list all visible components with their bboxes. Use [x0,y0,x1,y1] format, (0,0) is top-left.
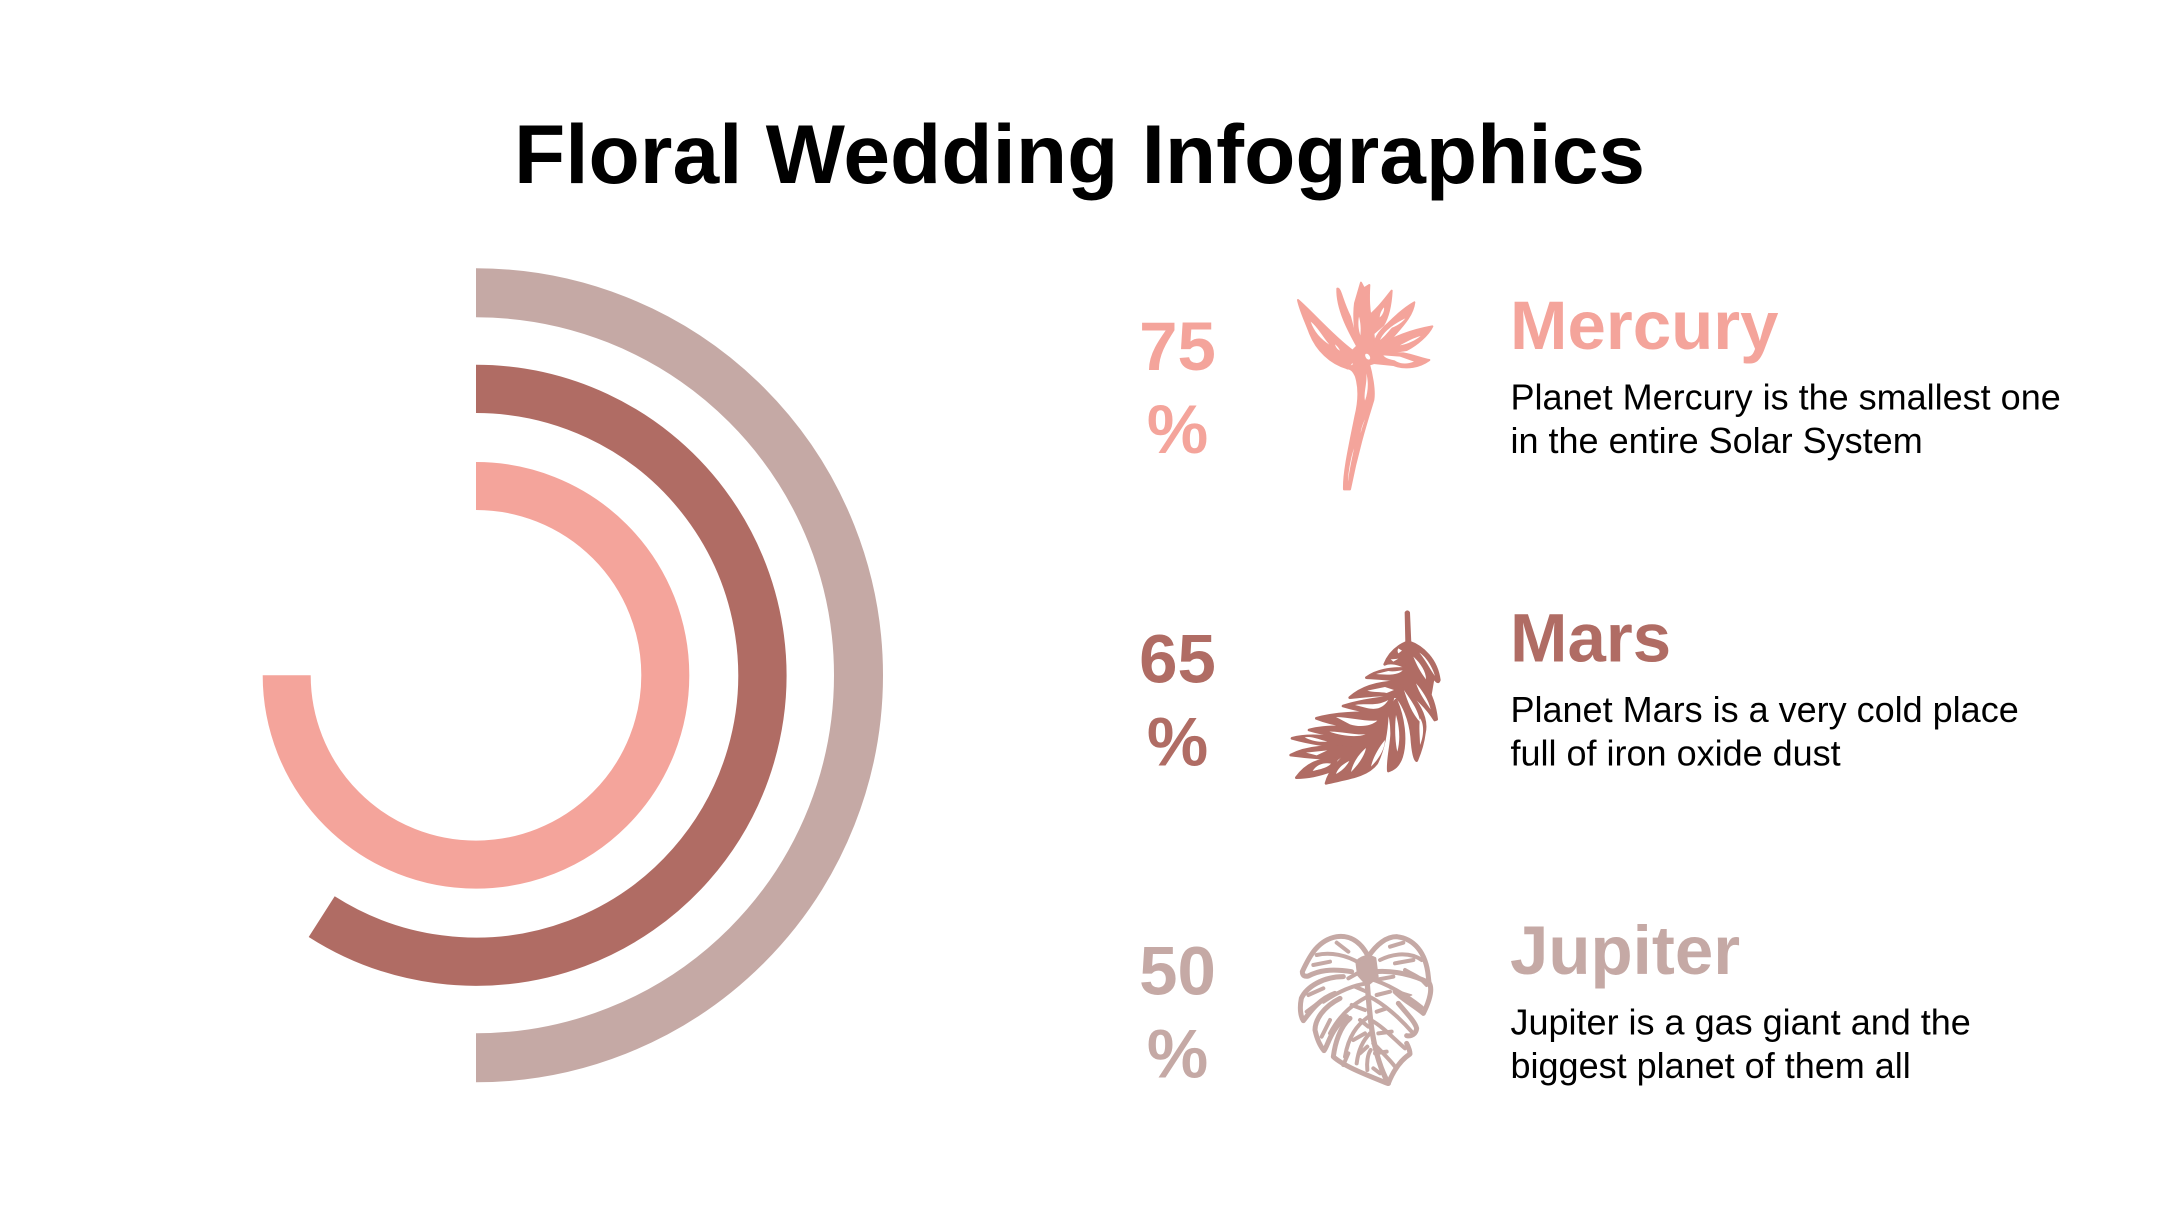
flower centre [1348,343,1375,368]
icon: bird of paradise flower [1298,283,1432,489]
inner ring: Mercury 75% [287,486,665,865]
leaf centre [1357,956,1377,985]
description: Mercury: Planet Mercury is the smallest one [1510,376,2061,418]
percentage: 75%: 75 [1139,308,1216,385]
radial progress chart [287,293,858,1058]
description: Mars: Planet Mars is a very cold place [1510,689,2019,730]
title: Floral Wedding Infographics [514,107,1645,201]
percentage: 75%: % [1147,391,1208,468]
percentage: 65%: 65 [1139,620,1216,698]
icon: feather leaf [1291,612,1439,783]
icon: monstera leaf [1300,936,1431,1083]
percentage: 65%: % [1147,704,1208,780]
row: Mars [1139,600,2019,783]
label: Jupiter: Jupiter [1510,912,1740,989]
middle ring: Mars [322,389,762,962]
row: Jupiter [1139,912,1971,1092]
row: Mercury [1139,283,2061,489]
description: Jupiter: biggest planet of them all [1510,1045,1911,1086]
description: Mercury: in the entire Solar System [1510,420,1923,461]
description: Mars: full of iron oxide dust [1510,732,1841,774]
outer ring: Jupiter 50% [476,293,858,1058]
description: Jupiter: Jupiter is a gas giant and the [1510,1002,1971,1042]
percentage: 50%: 50 [1139,932,1216,1010]
percentage: 50%: % [1147,1016,1208,1092]
label: Mars: Mars [1510,600,1671,676]
label: Mercury: Mercury [1510,287,1778,364]
